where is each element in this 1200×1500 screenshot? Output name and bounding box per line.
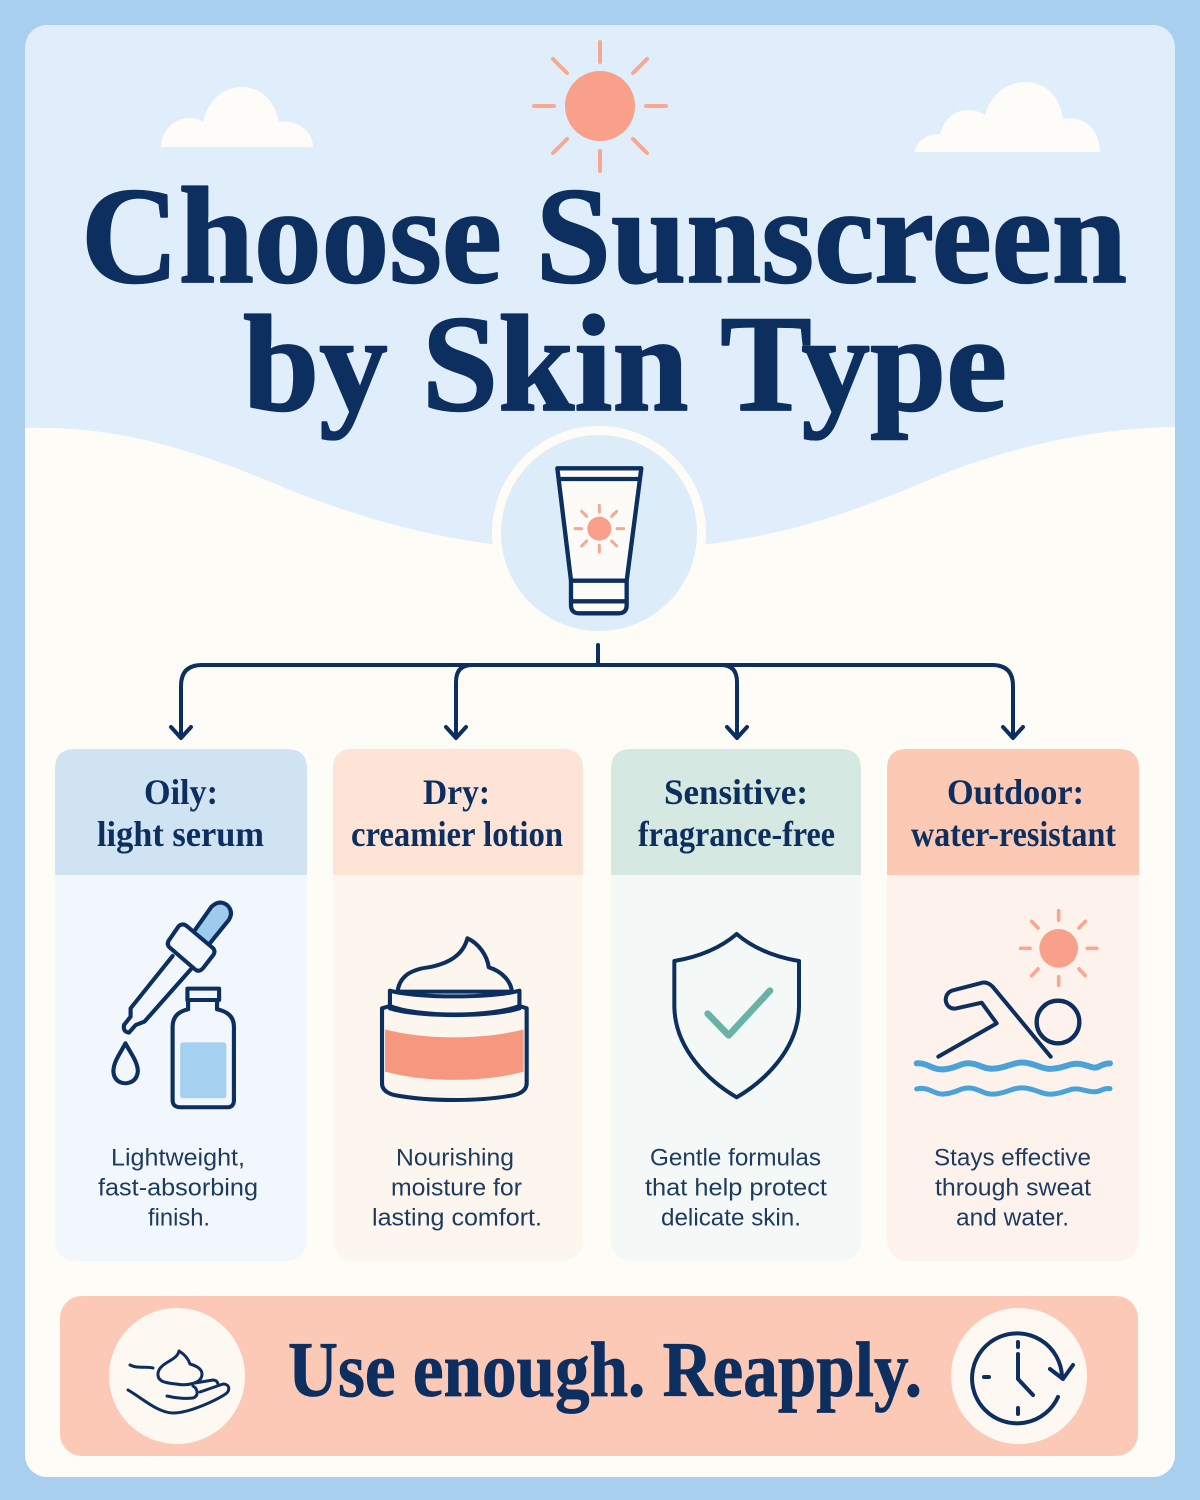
- icon: hand with sunscreen dollop: [109, 1308, 245, 1444]
- title: by Skin Type: [243, 287, 1007, 440]
- panel: sensitive card: Sensitive:: [664, 772, 808, 812]
- panel: outdoor card: [887, 749, 1139, 1261]
- panel: dry card: creamier lotion: [351, 814, 563, 854]
- text: sensitive description: Gentle formulas: [650, 1144, 821, 1172]
- text: oily description: fast-absorbing: [98, 1174, 258, 1202]
- text: dry description: Nourishing: [396, 1144, 514, 1172]
- text: call to action: Use enough. Reapply.: [288, 1326, 922, 1413]
- panel: oily card: Oily:: [144, 772, 218, 812]
- icon: sun: [534, 42, 666, 171]
- title: Choose Sunscreen: [81, 159, 1127, 312]
- title: [81, 159, 1127, 440]
- panel: oily card: [55, 749, 307, 1261]
- flow arrows: [171, 645, 1023, 738]
- text: dry description: moisture for: [391, 1174, 522, 1202]
- text: oily description: [98, 1144, 258, 1232]
- icon: right cloud: [914, 82, 1100, 152]
- panel: dry card: Dry:: [423, 772, 490, 812]
- text: oily description: finish.: [148, 1204, 210, 1232]
- icon: clock with arrow: [951, 1308, 1087, 1444]
- panel: dry card: [333, 749, 583, 1261]
- text: outdoor description: Stays effective: [934, 1144, 1091, 1172]
- text: oily description: Lightweight,: [111, 1144, 245, 1172]
- icon: left cloud: [161, 87, 313, 147]
- panel: sensitive card: [611, 749, 861, 1261]
- text: sensitive description: delicate skin.: [661, 1204, 801, 1232]
- icon: shield with check: [674, 934, 799, 1097]
- text: dry description: lasting comfort.: [372, 1204, 542, 1232]
- text: outdoor description: through sweat: [935, 1174, 1091, 1202]
- panel: oily card: light serum: [97, 814, 264, 854]
- callout banner: [60, 1296, 1138, 1456]
- icon: swimmer with sun: [917, 911, 1110, 1094]
- icon: cream jar: [382, 938, 527, 1100]
- panel: outdoor card: Outdoor:: [947, 772, 1084, 812]
- icon: sunscreen tube in circle: [492, 426, 706, 640]
- text: outdoor description: [934, 1144, 1091, 1232]
- text: dry description: [372, 1144, 542, 1232]
- text: sensitive description: [645, 1144, 827, 1232]
- text: sensitive description: that help protect: [645, 1174, 827, 1202]
- icon: dropper and bottle: [113, 903, 234, 1107]
- panel: sensitive card: fragrance-free: [638, 814, 835, 854]
- panel: outdoor card: water-resistant: [911, 814, 1116, 854]
- text: outdoor description: and water.: [956, 1204, 1069, 1232]
